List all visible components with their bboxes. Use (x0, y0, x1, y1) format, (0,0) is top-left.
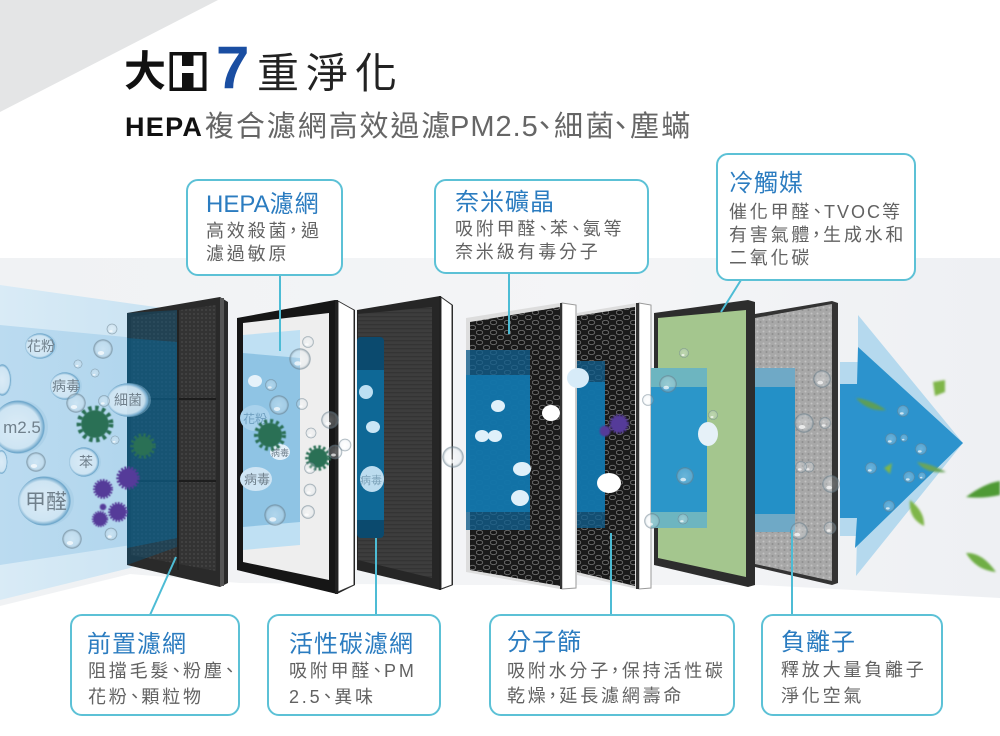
outgoing air arrow (840, 315, 963, 576)
title: 大 (124, 48, 166, 95)
filter 1: pre-filter (127, 297, 228, 587)
callout: nano mineral crystal: 奈米級有毒分子 (455, 242, 601, 262)
pollutant bubbles (0, 333, 151, 526)
leader lines (150, 273, 792, 615)
filter 7: negative ion (755, 301, 838, 585)
incoming air beam (0, 285, 177, 600)
title (124, 34, 404, 101)
title: 7 (216, 34, 249, 101)
callout: cold catalyst: 冷觸媒 (729, 170, 804, 197)
subtitle: 塵蟎 (630, 110, 693, 143)
callout: HEPA: 高效殺菌，過 (206, 221, 322, 241)
filter 3: activated carbon (357, 296, 453, 590)
callout: cold catalyst (717, 154, 915, 280)
subtitle: 、 (606, 111, 637, 143)
pollutant bubbles: m2.5 (3, 418, 41, 437)
callout: molecular sieve: 吸附水分子，保持活性碳 (507, 661, 726, 681)
filter 5: molecular sieve (577, 303, 651, 589)
pollutant bubbles: 苯 (79, 454, 93, 470)
subtitle: HEPA (125, 112, 203, 142)
callout: negative ion (762, 615, 942, 715)
callout: molecular sieve: 乾燥，延長濾網壽命 (507, 686, 684, 706)
callout: cold catalyst: 催化甲醛、TVOC等 (729, 202, 903, 222)
subtitle: 、 (530, 111, 561, 143)
callout: nano mineral crystal: 奈米礦晶 (455, 189, 555, 216)
callout: activated carbon: 2.5、異味 (289, 687, 376, 707)
subtitle: PM2.5 (450, 111, 539, 143)
callout: activated carbon: 活性碳濾網 (289, 631, 414, 658)
HEPA layer bubbles: 病毒 (271, 447, 289, 458)
filter 6: cold catalyst (651, 300, 755, 587)
callout: HEPA: 濾過敏原 (206, 244, 289, 264)
callout: molecular sieve (490, 615, 734, 715)
HEPA layer bubbles: 病毒 (360, 473, 382, 487)
callout: negative ion: 淨化空氣 (781, 686, 864, 706)
pollutant bubbles: 細菌 (114, 392, 142, 408)
HEPA layer bubbles: 病毒 (244, 472, 270, 487)
callout: pre-filter: 前置濾網 (87, 631, 187, 658)
virus particles (79, 408, 628, 526)
callout: pre-filter (71, 615, 241, 715)
callout: cold catalyst: 有害氣體，生成水和 (729, 225, 906, 245)
subtitle: 細菌 (554, 110, 617, 143)
callout: nano mineral crystal (435, 180, 648, 273)
HEPA layer bubbles: 花粉 (243, 411, 267, 426)
gray background band (0, 258, 1000, 606)
filter 2: HEPA (237, 300, 355, 594)
callout: molecular sieve: 分子篩 (507, 629, 582, 656)
water droplets (26, 324, 927, 549)
callout: cold catalyst: 二氧化碳 (729, 248, 812, 268)
callout: nano mineral crystal: 吸附甲醛、苯、氨等 (455, 219, 624, 239)
pollutant bubbles: 甲醛 (25, 491, 67, 514)
HEPA layer bubbles (240, 368, 718, 506)
callout: HEPA: HEPA濾網 (206, 191, 320, 218)
callout: activated carbon (268, 615, 440, 715)
callout: HEPA (187, 180, 342, 275)
callout: negative ion: 釋放大量負離子 (781, 660, 927, 680)
callout: pre-filter: 花粉、顆粒物 (88, 687, 204, 707)
pollutant bubbles: 病毒 (52, 378, 80, 394)
leaves (856, 380, 1000, 572)
icon: H logo (170, 52, 206, 91)
title: 重淨化 (257, 50, 404, 97)
pollutant bubbles: 花粉 (27, 338, 55, 354)
callout: activated carbon: 吸附甲醛、PM (289, 661, 417, 681)
subtitle: 複合濾網高效過濾 (205, 110, 452, 143)
callout: negative ion: 負離子 (781, 629, 856, 656)
callout: pre-filter: 阻擋毛髮、粉塵、 (88, 660, 241, 681)
filter 4: nano mineral crystal (466, 303, 576, 589)
corner triangle (0, 0, 218, 112)
